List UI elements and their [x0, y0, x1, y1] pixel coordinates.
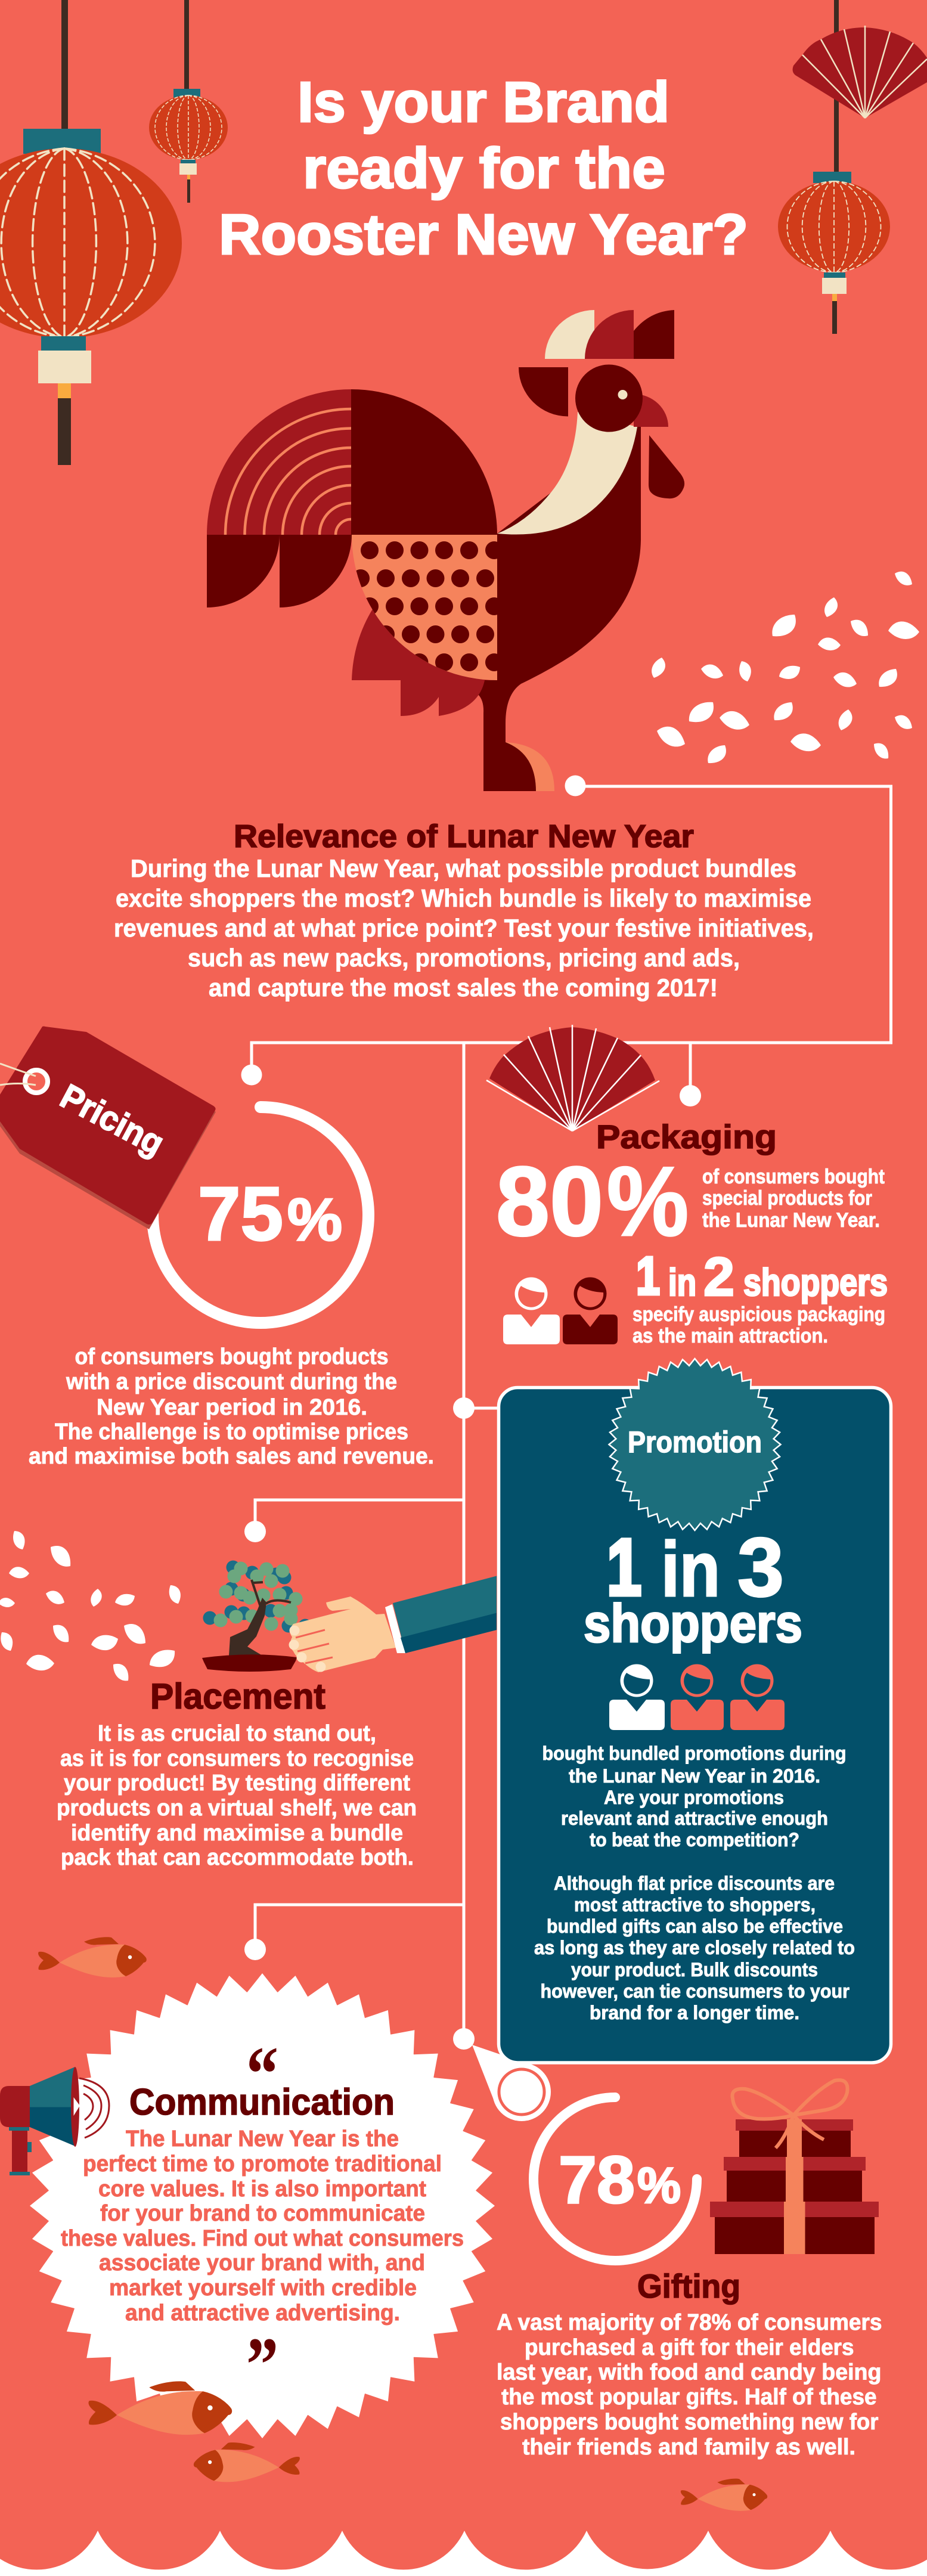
icon: fish bottom right [681, 2479, 767, 2511]
title: ready for the [303, 137, 665, 200]
promotion text: brand for a longer time. [590, 2002, 799, 2023]
intro text: excite shoppers the most? Which bundle is likely to maximise [116, 884, 811, 912]
hackle [519, 367, 568, 416]
icon: gift boxes [710, 2080, 879, 2254]
pricing text: The challenge is to optimise prices [55, 1419, 408, 1444]
starburst badge [572, 1322, 817, 1567]
petals: left scatter [0, 1529, 184, 1684]
title: Is your Brand [297, 70, 669, 134]
promotion text: as long as they are closely related to [534, 1937, 855, 1958]
promotion text: the Lunar New Year in 2016. [569, 1765, 820, 1787]
icon: person white [503, 1277, 560, 1344]
gifting text: last year, with food and candy being [497, 2360, 881, 2385]
stat text [702, 1165, 885, 1232]
intro text: During the Lunar New Year, what possible product bundles [131, 854, 796, 882]
communication text [61, 2126, 464, 2326]
head [575, 365, 643, 432]
promotion text: most attractive to shoppers, [574, 1894, 816, 1915]
placement text: pack that can accommodate both. [61, 1845, 414, 1870]
intro text [114, 854, 814, 1002]
communication text: market yourself with credible [109, 2276, 417, 2301]
panel: promotion [498, 1322, 891, 2063]
icon: fan [486, 1025, 659, 1131]
stat: 78%: % [637, 2157, 681, 2214]
icon: fish mirrored [194, 2442, 300, 2482]
bottom scalloped edge [0, 2531, 927, 2576]
starburst badge: Promotion [628, 1425, 762, 1459]
speech bubble pointer [472, 2045, 551, 2121]
heading: placement: Placement [150, 1676, 325, 1716]
stat: 1 in 3 shoppers: shoppers [584, 1594, 802, 1654]
ring 78 percent [534, 2097, 697, 2261]
communication text: The Lunar New Year is the [126, 2126, 399, 2152]
placement text: identify and maximise a bundle [71, 1821, 403, 1846]
communication text: for your brand to communicate [100, 2201, 425, 2226]
gifting text: purchased a gift for their elders [525, 2335, 854, 2360]
stat: 1 in 2 shoppers [636, 1247, 888, 1307]
intro text: and capture the most sales the coming 2017! [209, 974, 718, 1002]
panel: pricing [0, 1027, 434, 1469]
promotion text: Are your promotions [604, 1787, 784, 1808]
promotion text: to beat the competition? [590, 1829, 799, 1850]
placement text: products on a virtual shelf, we can [57, 1796, 417, 1821]
stat: 1 in 3 shoppers: in [661, 1526, 720, 1613]
stat: 1 in 3 shoppers: 3 [737, 1520, 784, 1614]
stat: 75% [198, 1171, 342, 1257]
tail feathers [207, 389, 352, 607]
polka dots on breast [352, 541, 503, 671]
stat: 78% [559, 2143, 681, 2217]
price tag: Pricing [54, 1077, 170, 1163]
intro text: such as new packs, promotions, pricing and ads, [188, 944, 740, 972]
stat text: special products for [702, 1187, 872, 1210]
communication text: and attractive advertising. [125, 2301, 400, 2326]
eye [618, 390, 627, 399]
heading: gifting: Gifting [637, 2267, 740, 2305]
intro text: revenues and at what price point? Test your festive initiatives, [114, 914, 814, 942]
intro: relevance of Lunar New Year [114, 819, 814, 1002]
lantern: small top [149, 0, 228, 203]
promotion text [534, 1743, 855, 2023]
rooster illustration [207, 310, 684, 791]
promotion text: bundled gifts can also be effective [547, 1915, 843, 1937]
stat text: the Lunar New Year. [702, 1209, 880, 1232]
placement text: your product! By testing different [64, 1771, 410, 1796]
icon: fan top right [793, 26, 927, 118]
icon: hand [289, 1576, 497, 1672]
heading: communication: Communication [129, 2082, 395, 2123]
panel: packaging [486, 1025, 888, 1347]
gifting text: A vast majority of 78% of consumers [497, 2310, 882, 2335]
stat: 1 in 2 shoppers: 1 [636, 1247, 660, 1306]
stat: 1 in 3 shoppers: 1 [607, 1523, 641, 1612]
gifting text: shoppers bought something new for [500, 2410, 879, 2435]
connector lines [252, 786, 891, 2039]
promotion text: bought bundled promotions during [542, 1743, 847, 1764]
placement text [57, 1721, 417, 1870]
icon: fish large [88, 2381, 232, 2435]
gifting text: their friends and family as well. [522, 2435, 855, 2460]
beak [634, 394, 668, 427]
stat: 1 in 2 shoppers: shoppers [743, 1261, 888, 1304]
heading: packaging: Packaging [596, 1118, 777, 1155]
pricing text: New Year period in 2016. [97, 1395, 367, 1420]
icon: person coral [671, 1664, 724, 1730]
title [219, 70, 748, 266]
panel: placement [57, 1561, 497, 1870]
panel: communication [0, 1878, 590, 2534]
gifting text [497, 2310, 882, 2460]
promotion text: however, can tie consumers to your [540, 1980, 850, 2002]
stat: 1 in 2 shoppers: 2 [703, 1247, 734, 1307]
promotion text: relevant and attractive enough [561, 1808, 828, 1829]
icon: person white [609, 1664, 665, 1730]
stat: 1 in 2 shoppers: in [668, 1261, 696, 1304]
pricing text [29, 1344, 434, 1469]
icon: fish upper left [38, 1937, 147, 1977]
white starburst [0, 1878, 590, 2534]
packaging text: as the main attraction. [633, 1325, 828, 1347]
panel: gifting [497, 2080, 882, 2460]
promotion text: Although flat price discounts are [554, 1873, 835, 1894]
promotion text: your product. Bulk discounts [571, 1959, 818, 1980]
wing [351, 389, 497, 535]
communication text: these values. Find out what consumers [61, 2226, 464, 2251]
packaging text [633, 1303, 885, 1347]
stat: 75%: 75 [198, 1171, 283, 1257]
stat: 80%: % [607, 1146, 689, 1256]
stat text: of consumers bought [702, 1165, 885, 1188]
placement text: as it is for consumers to recognise [60, 1746, 414, 1771]
icon: megaphone [0, 2067, 109, 2175]
wattle [649, 435, 684, 498]
open quote: “ [246, 2031, 278, 2117]
heading: relevance: Relevance of Lunar New Year [234, 819, 694, 854]
stat: 75%: % [287, 1186, 342, 1253]
placement text: It is as crucial to stand out, [98, 1721, 376, 1746]
comb [545, 310, 674, 359]
icon: bonsai [202, 1561, 312, 1672]
stat: 80% [496, 1146, 689, 1256]
stat: 1 in 3 shoppers [584, 1520, 802, 1654]
neck [497, 412, 637, 535]
pricing text: with a price discount during the [66, 1369, 397, 1394]
communication text: core values. It is also important [98, 2177, 426, 2202]
pricing text: and maximise both sales and revenue. [29, 1444, 434, 1469]
title: Rooster New Year? [219, 203, 748, 266]
ring 75 percent [153, 1107, 368, 1323]
petals: right scatter [649, 568, 920, 768]
pricing text: of consumers bought products [75, 1344, 389, 1369]
communication text: associate your brand with, and [99, 2250, 425, 2276]
stat: 78%: 78 [559, 2143, 635, 2217]
stat: 80%: 80 [496, 1146, 603, 1256]
price tag [0, 1027, 216, 1229]
close quote: ” [246, 2322, 278, 2408]
icon: person coral [730, 1664, 785, 1730]
gifting text: the most popular gifts. Half of these [501, 2385, 876, 2410]
packaging text: specify auspicious packaging [633, 1303, 885, 1326]
lantern: large left [0, 0, 182, 465]
lantern: right [778, 0, 890, 334]
connector nodes [241, 775, 701, 2050]
communication text: perfect time to promote traditional [83, 2152, 442, 2177]
icon: person dark [563, 1277, 618, 1344]
